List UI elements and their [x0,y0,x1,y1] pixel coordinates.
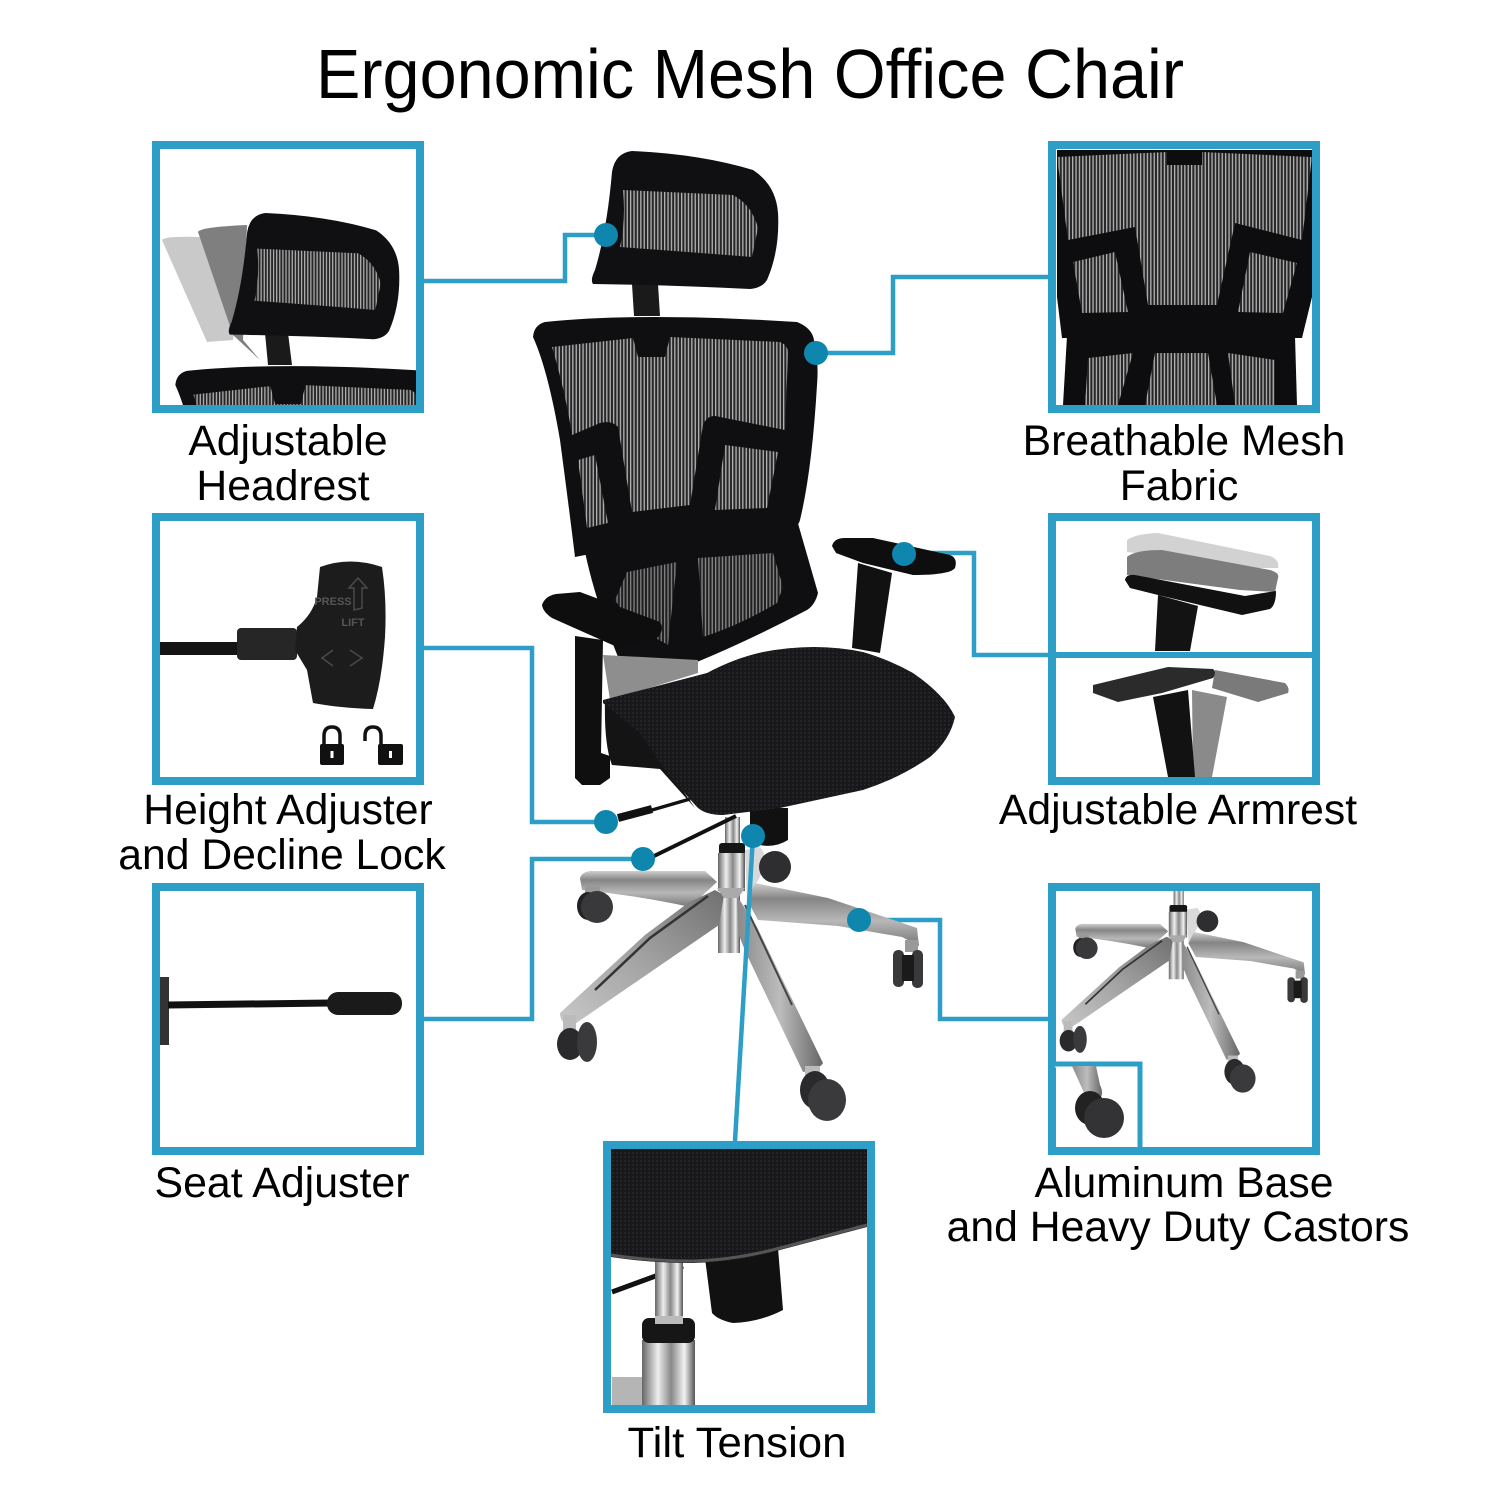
main chair photo [533,151,956,1121]
handle arrows [322,578,367,666]
inset frame [1052,1064,1140,1150]
panel: seat adjuster [156,887,420,1151]
handle press marking: PRESS [314,596,352,608]
lever mount [160,977,169,1045]
icon: locked padlock [320,727,344,765]
panel: height adjuster [156,517,420,781]
cable [160,642,240,655]
lower armrest photo [1093,667,1289,777]
tilt connector [735,836,753,1141]
label: adjustable headrest: Headrest [196,462,370,510]
panel: adjustable headrest [152,141,424,413]
headrest photo [162,213,416,405]
chair: right arm post [852,563,892,653]
base photo [1060,887,1308,1093]
castor close-up [1072,1066,1124,1138]
chair: lumbar [585,520,818,662]
chair: tilt knob [750,808,788,846]
label: adjustable headrest: Adjustable [188,417,388,465]
label: aluminum base: and Heavy Duty Castors [947,1203,1409,1251]
chair: seat [603,647,955,815]
chair: base and castors [557,817,923,1121]
chair: left arm post [575,636,610,785]
label: seat adjuster: Seat Adjuster [154,1159,410,1207]
chair: headrest [592,151,778,289]
handle [295,562,386,709]
icon: unlocked padlock [365,727,403,765]
divider [1052,652,1316,658]
panel: breathable mesh [1052,145,1316,409]
title: Ergonomic Mesh Office Chair [316,35,1184,113]
chair: right armrest [832,538,956,575]
upper armrest photo [1125,533,1278,651]
connector lines [424,235,1048,1019]
label: aluminum base: Aluminum Base [1035,1159,1333,1207]
chair: left armrest [542,592,662,647]
panel: tilt tension [607,1145,871,1409]
handle lift marking: LIFT [341,617,365,629]
tilt photo [611,1149,867,1405]
label: breathable mesh: Breathable Mesh [1023,417,1345,465]
label: breathable mesh: Fabric [1120,462,1238,510]
chair: levers [618,799,736,858]
chair: under seat [605,700,695,808]
chair: mechanism [603,655,698,700]
chair: back [533,317,818,557]
lever rod [168,1003,330,1005]
label: tilt tension: Tilt Tension [628,1419,846,1467]
label: adjustable armrest: Adjustable Armrest [999,786,1357,834]
connector [237,628,297,660]
callout dots [594,223,916,932]
label: height adjuster: Height Adjuster [143,786,433,834]
panel: adjustable armrest [1052,517,1316,781]
label: height adjuster: and Decline Lock [118,831,446,879]
chair: headrest post [632,284,660,316]
lever grip [327,992,402,1015]
panel: aluminum base [1052,887,1316,1151]
mesh photo [1057,150,1312,405]
